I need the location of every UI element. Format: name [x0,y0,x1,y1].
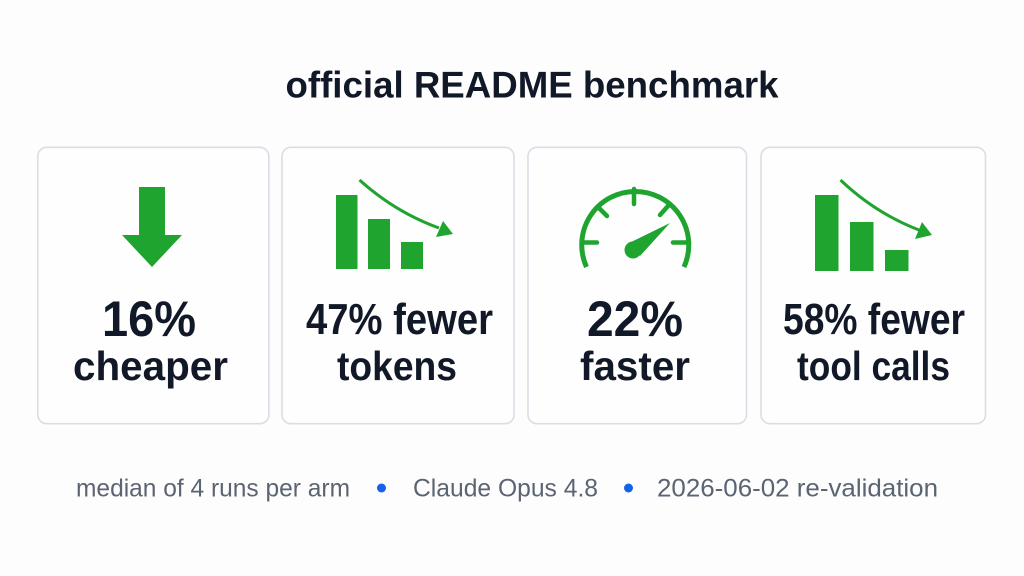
icon: down arrow [122,187,182,267]
stat text: 58% fewer tool calls: 58% fewer [783,295,965,344]
title: official README benchmark [286,64,779,106]
stat text: 16% cheaper: cheaper [73,343,228,389]
icon: descending bars with arrow [815,180,932,271]
stat text: 47% fewer tokens [306,295,493,389]
bullet [624,484,633,492]
bullet [377,484,386,492]
stat text: 16% cheaper: 16% [102,291,196,347]
stat text: 22% faster: 22% [587,291,683,347]
stat text: 47% fewer tokens: tokens [337,343,457,389]
stat text: 58% fewer tool calls [783,295,965,389]
stat text: 22% faster [580,291,690,389]
panel: 22% faster [528,147,746,424]
icon: speedometer [582,189,689,267]
panel: 16% cheaper [38,147,269,424]
stat text: 58% fewer tool calls: tool calls [797,343,950,389]
footer note: model: Claude Opus 4.8 [413,474,598,502]
stat text: 22% faster: faster [580,343,690,389]
icon: descending bars with arrow [336,180,453,269]
footer note: runs: median of 4 runs per arm [76,474,350,502]
stat text: 16% cheaper [73,291,228,389]
stat text: 47% fewer tokens: 47% fewer [306,295,493,344]
panel: 58% fewer tool calls [761,147,986,424]
panel: 47% fewer tokens [282,147,514,424]
footer note: date: 2026-06-02 re-validation [657,474,938,502]
